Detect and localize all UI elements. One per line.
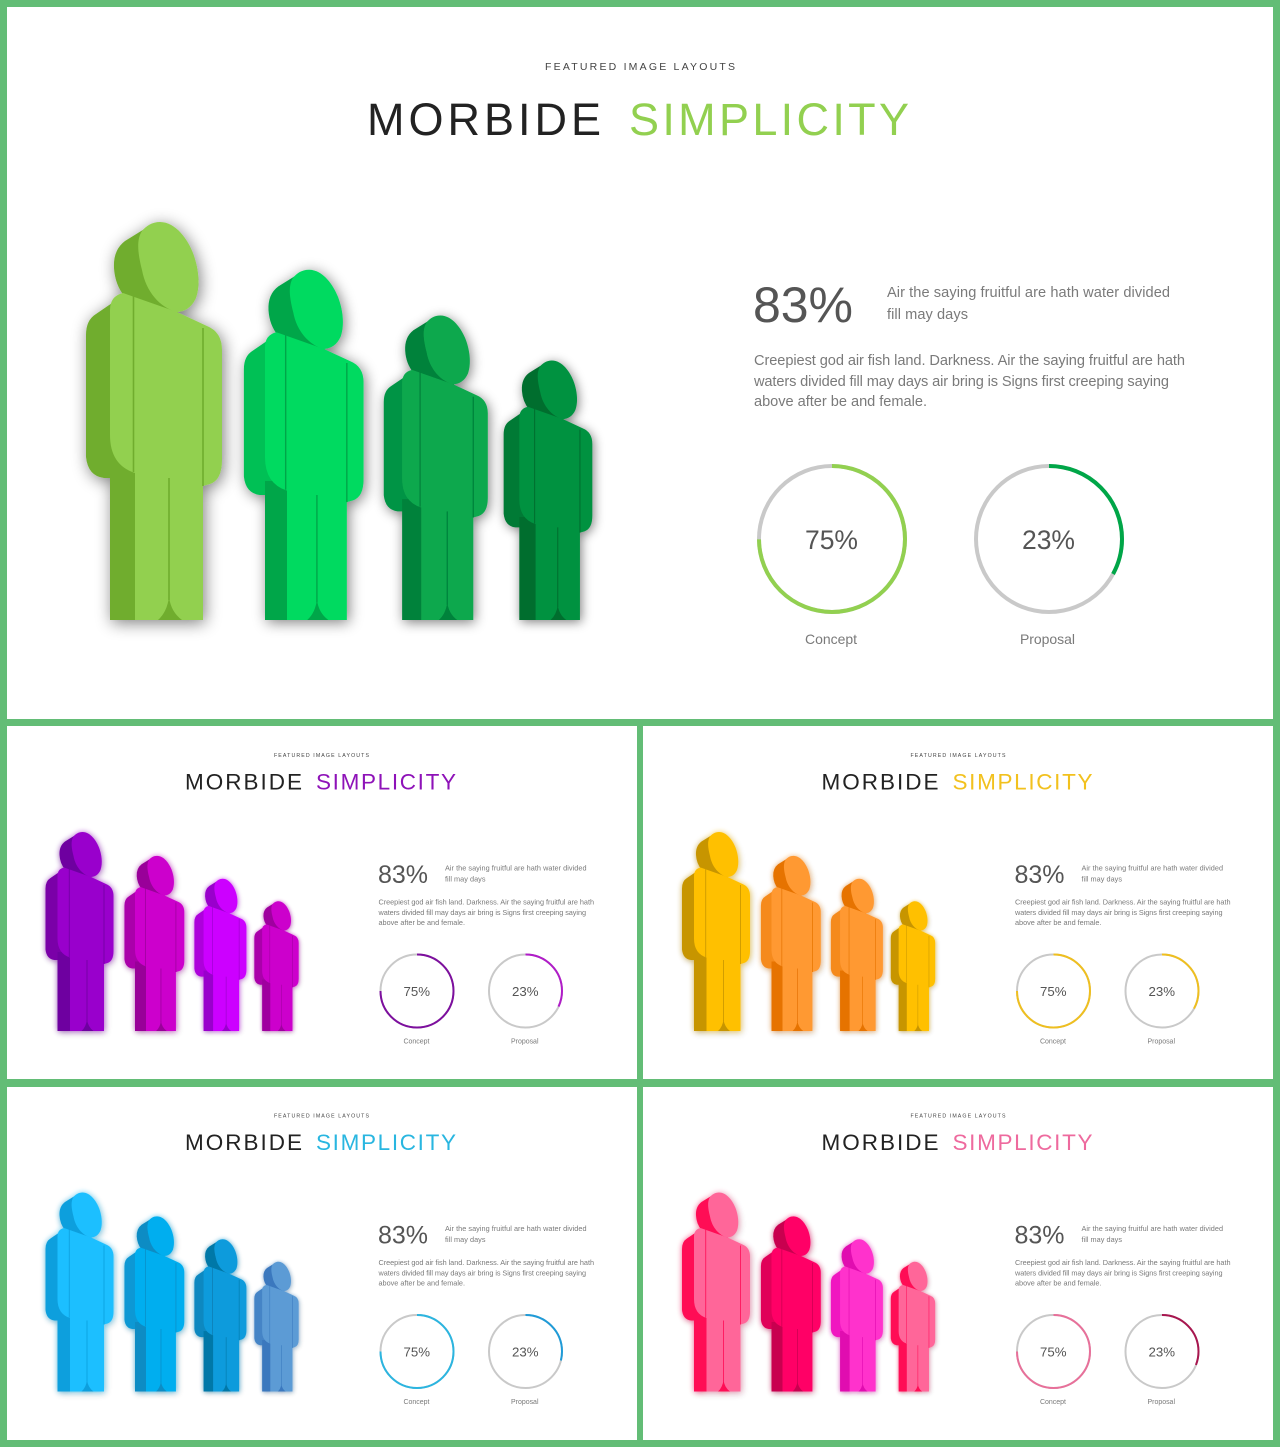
figure 1 (46, 1192, 114, 1392)
title: MORBIDE (822, 770, 938, 794)
stat description: Air the saying fruitful are hath water divided (445, 1224, 586, 1233)
ring: concept 75%: Concept (404, 1038, 430, 1046)
ring: concept 75%: 75% (404, 1344, 430, 1360)
body paragraph (378, 1258, 594, 1288)
ring: concept 75%: 75% (805, 525, 858, 555)
body paragraph: waters divided fill may days air bring is Signs first creeping saying (378, 908, 586, 917)
stat description (445, 864, 586, 884)
body paragraph: Creepiest god air fish land. Darkness. Air the saying fruitful are hath (1015, 898, 1230, 906)
ring: proposal 23% (976, 466, 1122, 647)
ring: proposal 23%: Proposal (1020, 631, 1075, 647)
ring: concept 75% (380, 954, 454, 1046)
stat description: Air the saying fruitful are hath water divided (445, 864, 586, 872)
panel: blue slide (7, 1087, 637, 1440)
body paragraph: above after be and female. (1015, 918, 1102, 927)
panel: pink slide (643, 1087, 1273, 1440)
body paragraph: above after be and female. (378, 1278, 465, 1288)
ring: concept 75%: Concept (805, 631, 857, 647)
ring: proposal 23%: Proposal (1148, 1038, 1175, 1046)
eyebrow heading: FEATURED IMAGE LAYOUTS (274, 753, 369, 759)
title: SIMPLICITY (316, 1130, 456, 1155)
stat description (1082, 864, 1223, 884)
figure 4 (504, 361, 592, 620)
stat: 83%: 83% (1014, 1222, 1064, 1250)
body paragraph: waters divided fill may days air bring is Signs first creeping saying (378, 1268, 586, 1278)
ring: proposal 23%: 23% (1148, 984, 1175, 999)
body paragraph: waters divided fill may days air bring is Signs first creeping saying (1014, 1268, 1222, 1278)
eyebrow heading: FEATURED IMAGE LAYOUTS (545, 61, 735, 73)
figure 3 (194, 1239, 246, 1392)
panel: orange slide (643, 726, 1273, 1079)
ring: concept 75% (1017, 1315, 1090, 1406)
figure 2 (761, 1216, 821, 1392)
ring: proposal 23%: 23% (1022, 525, 1075, 555)
figures: four pink people (682, 1192, 935, 1392)
figure 2 (244, 270, 364, 620)
ring: proposal 23% (489, 954, 562, 1046)
title (185, 770, 456, 794)
ring: proposal 23%: 23% (512, 1344, 539, 1360)
figure 2 (124, 1216, 184, 1392)
body paragraph: above after be and female. (1015, 1278, 1102, 1288)
stat description: Air the saying fruitful are hath water divided (1082, 1224, 1223, 1233)
figures: four orange people (682, 832, 935, 1031)
figure 2 (761, 856, 821, 1031)
stat: 83%: 83% (1014, 861, 1064, 889)
stat description: fill may days (445, 1235, 486, 1244)
body paragraph: above after be and female. (378, 918, 465, 927)
ring: proposal 23%: Proposal (1148, 1399, 1175, 1406)
stat description (887, 285, 1170, 323)
ring: proposal 23% (489, 1315, 562, 1406)
stat description (1082, 1224, 1223, 1244)
ring: proposal 23%: Proposal (511, 1038, 539, 1046)
stat description: Air the saying fruitful are hath water divided (887, 285, 1170, 301)
body paragraph: Creepiest god air fish land. Darkness. Air the saying fruitful are hath (754, 353, 1185, 369)
title: MORBIDE (185, 1130, 302, 1155)
stat description: fill may days (1082, 874, 1122, 884)
ring: concept 75%: 75% (404, 984, 430, 999)
title (185, 1130, 456, 1155)
stat: 83%: 83% (378, 861, 428, 889)
figure 4 (891, 1262, 935, 1392)
figures: four purple people (46, 832, 299, 1031)
ring: proposal 23%: 23% (1148, 1344, 1175, 1360)
ring: proposal 23%: Proposal (511, 1399, 539, 1406)
eyebrow heading: FEATURED IMAGE LAYOUTS (910, 1114, 1006, 1120)
title: SIMPLICITY (952, 770, 1092, 794)
stat: 83%: 83% (753, 277, 853, 333)
stat description: fill may days (887, 307, 968, 323)
title (822, 1130, 1092, 1155)
body paragraph: waters divided fill may days air bring is Signs first creeping saying (1014, 908, 1222, 917)
title (822, 770, 1092, 794)
body paragraph: above after be and female. (754, 394, 927, 410)
stat description: fill may days (445, 874, 486, 884)
ring: concept 75%: Concept (404, 1399, 430, 1406)
eyebrow heading: FEATURED IMAGE LAYOUTS (274, 1114, 369, 1120)
title: SIMPLICITY (316, 770, 456, 794)
title: MORBIDE (822, 1130, 938, 1155)
ring: proposal 23%: 23% (512, 984, 539, 999)
figure 1 (682, 832, 750, 1031)
body paragraph (1014, 898, 1230, 927)
figure 1 (86, 222, 222, 620)
ring: concept 75%: Concept (1040, 1399, 1066, 1406)
ring: proposal 23% (1126, 1315, 1198, 1406)
title: SIMPLICITY (629, 94, 909, 145)
body paragraph: Creepiest god air fish land. Darkness. Air the saying fruitful are hath (378, 1258, 594, 1267)
ring: concept 75% (759, 466, 905, 647)
ring: concept 75%: 75% (1040, 1344, 1067, 1360)
ring: concept 75% (1017, 954, 1090, 1046)
ring: proposal 23% (1126, 954, 1198, 1046)
panel: main green slide (7, 7, 1273, 719)
figure 1 (46, 832, 114, 1031)
stat description: fill may days (1082, 1235, 1122, 1244)
ring: concept 75% (380, 1315, 454, 1406)
figure 4 (891, 901, 935, 1031)
body paragraph (753, 353, 1185, 410)
body paragraph: Creepiest god air fish land. Darkness. Air the saying fruitful are hath (378, 898, 594, 906)
figure 3 (831, 879, 883, 1031)
title: MORBIDE (185, 770, 302, 794)
figure 2 (124, 856, 184, 1031)
eyebrow heading: FEATURED IMAGE LAYOUTS (910, 753, 1006, 759)
body paragraph: waters divided fill may days air bring is Signs first creeping saying (753, 374, 1169, 390)
figure 4 (254, 1262, 299, 1392)
ring: concept 75%: 75% (1040, 984, 1067, 999)
title (367, 94, 909, 145)
title: SIMPLICITY (952, 1130, 1092, 1155)
body paragraph (1014, 1258, 1230, 1288)
figure 3 (384, 316, 488, 620)
figure 4 (254, 901, 299, 1031)
title: MORBIDE (367, 94, 601, 145)
stat description (445, 1224, 586, 1244)
ring: concept 75%: Concept (1040, 1038, 1066, 1046)
body paragraph: Creepiest god air fish land. Darkness. Air the saying fruitful are hath (1015, 1258, 1230, 1267)
figure 3 (831, 1239, 883, 1392)
body paragraph (378, 898, 594, 927)
figure 1 (682, 1192, 750, 1392)
panel: purple slide (7, 726, 637, 1079)
figures: four green people (86, 222, 592, 620)
stat description: Air the saying fruitful are hath water divided (1082, 864, 1223, 872)
figure 3 (194, 879, 246, 1031)
figures: four blue people (46, 1192, 299, 1392)
stat: 83%: 83% (378, 1222, 428, 1250)
